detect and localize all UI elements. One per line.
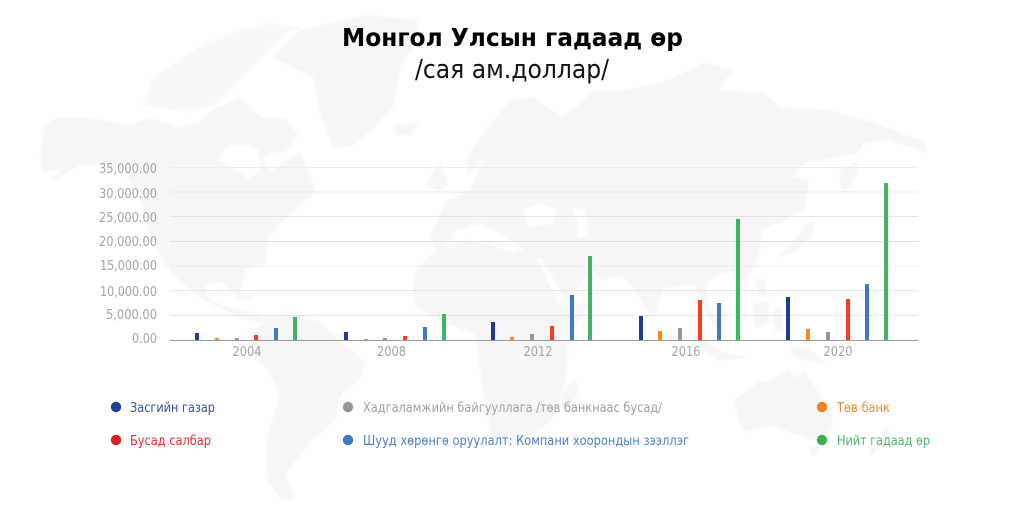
legend item: total external debt: Нийт гадаад өр: [837, 434, 930, 449]
south america: [252, 312, 365, 500]
y axis labels: 5,000.00: [106, 307, 157, 323]
y axis labels: 10,000.00: [100, 284, 157, 300]
eurasia: [430, 63, 927, 332]
subtitle: /сая ам.доллар/: [415, 55, 609, 85]
iceland: [392, 123, 420, 135]
legend item: government: Засгийн газар: [130, 401, 215, 416]
bars: other sectors: [254, 299, 850, 340]
bar chart: [99, 161, 918, 360]
australia: [735, 369, 832, 441]
y axis labels: 35,000.00: [99, 161, 157, 177]
y axis labels: [99, 161, 157, 347]
x axis labels: 2008: [377, 344, 406, 360]
canadian arctic islands: [142, 23, 300, 112]
tasmania: [810, 446, 820, 456]
legend: [111, 401, 930, 449]
new zealand: [868, 426, 892, 456]
bars: central bank: [215, 329, 810, 340]
y axis labels: 15,000.00: [100, 258, 157, 274]
y axis labels: 25,000.00: [99, 210, 157, 226]
southeast asian islands: [692, 278, 825, 364]
bars: total external debt: [293, 183, 888, 340]
x axis labels: 2016: [672, 344, 700, 360]
y axis labels: 30,000.00: [99, 186, 157, 202]
black sea: [522, 203, 558, 227]
y axis labels: 0.00: [132, 331, 157, 347]
caspian sea: [572, 207, 589, 238]
greenland: [273, 15, 417, 147]
x axis line: [170, 340, 918, 342]
y axis labels: 20,000.00: [99, 234, 157, 250]
bars: government: [195, 297, 790, 340]
japan: [779, 220, 815, 257]
legend item: central bank: [817, 401, 890, 416]
bars: deposit-taking institutions: [235, 328, 830, 340]
x axis labels: 2012: [524, 344, 552, 360]
uk and ireland: [425, 160, 448, 192]
bars: direct investment: [274, 284, 869, 340]
legend item: central bank: Төв банк: [836, 401, 890, 416]
x axis labels: 2020: [824, 344, 852, 360]
africa: [412, 240, 590, 447]
red sea and gulf: [536, 258, 566, 304]
north america: [40, 98, 316, 322]
hudson bay: [218, 145, 262, 180]
title: Монгол Улсын гадаад өр: [342, 23, 683, 52]
legend item: other sectors: Бусад салбар: [130, 434, 211, 449]
x axis labels: 2004: [232, 344, 262, 360]
legend item: deposit-taking institutions: Хадгаламжийн байгууллага /төв банкнаас бусад/: [363, 401, 663, 416]
legend item: direct investment: Шууд хөрөнгө оруулалт: Компани хоорондын зээллэг: [363, 434, 689, 449]
madagascar: [560, 379, 579, 412]
mediterranean sea: [452, 224, 525, 250]
x axis labels: [232, 344, 852, 360]
gridlines: [170, 168, 918, 316]
sakhalin and kamchatka: [840, 160, 859, 192]
